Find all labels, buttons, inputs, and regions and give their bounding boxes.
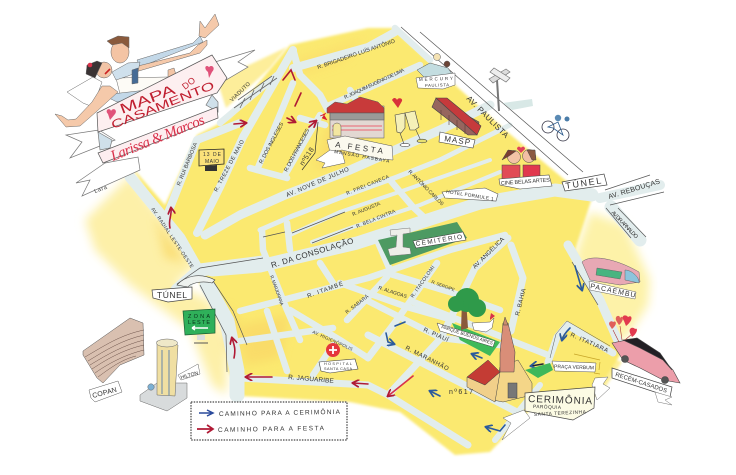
door [508,383,517,398]
ceremony ribbon [502,377,610,440]
ribbon [327,136,393,160]
bride head [96,62,112,78]
label: tunel top: TÚNEL [565,175,602,191]
street names: R. SERGIPE [431,279,456,292]
street names: R. MARANHÃO [404,345,450,373]
street names: R. RUI BARBOSA [176,142,199,187]
spire [503,317,508,325]
hand-drawn road outlines [177,27,664,372]
title banner: DO [180,75,197,92]
groom arm [130,40,207,73]
groom head [111,41,129,63]
label [178,364,200,380]
legend text: CAMINHO PARA A CERIMÔNIA [219,407,341,418]
red arrows: path to the party [169,70,413,396]
dog [472,318,494,332]
icon: champagne glasses and heart [392,98,427,147]
label: pacaembu and stadium: PACAEMBU [590,283,636,300]
street names: R. MARJORANA [269,275,285,306]
street sign post [489,68,510,111]
plaza: praca verbum: PRAÇA VERBUM [554,364,594,371]
sidewalk tile [503,99,533,110]
groom hand [199,14,219,38]
park: parque buenos aires: PARQUE BUENOS AIRES [441,324,494,346]
blue arrows: path to the ceremony [386,266,582,431]
legend: CAMINHO PARA A FESTA [218,425,325,434]
street names: R. ITAMBÉ [306,280,344,300]
map base: yellow city blocks [85,28,650,455]
street names: AV. PAULISTA [465,94,511,140]
label: hotel formule 1: HOTEL FORMULE 1 [446,189,494,203]
signature: Lara [94,184,109,195]
street names: R. BELA CINTRA [356,208,397,230]
label: cine belas artes [499,175,552,189]
roof [467,360,500,385]
street names: R. JOAQUIM EUGÊNIO DE LIMA [342,66,406,101]
ceremony ribbon: CERIMÔNIA [528,392,593,407]
street names: AV. DR. ARNALDO [610,210,639,241]
hospital santa casa [319,343,358,373]
label: pacaembu and stadium [582,258,640,300]
label: tunel left and portal: TÚNEL [157,290,187,300]
street names: R. AUGUSTA [352,201,382,218]
bride hand on back [168,68,178,86]
church: ceremony [449,317,532,402]
couple illustration [55,14,219,127]
hospital santa casa: HOSPITAL [324,362,352,366]
recem-casados ribbon: RECÉM-CASADOS [614,371,668,395]
street names: AV. HIGIENÓPOLIS [312,328,354,352]
street names: R. ALAGOAS [377,285,408,300]
sign: 13 de maio: 13 DE [203,152,222,158]
street names: AV. NOVE DE JULHO [285,167,350,199]
street names: R. FREI CANECA [346,174,391,197]
names banner: Larissa & Marcos [108,112,207,165]
street names: AV. REBOUÇAS [608,178,661,201]
street names: R. DA CONSOLAÇÃO [270,236,355,270]
street names: VIADUTO [229,81,252,103]
street names: R. ITATIARA [569,332,609,355]
title banner [97,55,227,132]
nave wall [467,372,500,402]
car body [612,340,680,383]
newlyweds car and hearts [609,315,680,384]
viaduct arches [234,76,277,108]
label: cine belas artes: CINE BELAS ARTES [501,178,550,187]
title text: MAPA [117,81,178,117]
mansion: a festa: A FESTA [335,140,384,156]
bride veil [67,77,102,107]
icon: bicycle [542,115,570,141]
label [437,323,495,347]
cemetery: CEMITÉRIO [415,232,463,248]
mansion: a festa: nº518 [299,147,316,167]
building: copan: COPAN [92,387,118,400]
mansion: a festa [299,97,393,170]
street names: R. ITACOLOMI [410,265,436,299]
tower [500,323,515,372]
facade [493,360,532,402]
sign: zona leste: LESTE [188,320,210,326]
street names: R. ANTÔNIO CARLOS [407,168,446,208]
building: hilton: HILTON [180,370,199,381]
street names [149,37,661,385]
number line [302,122,318,170]
label: tunel left and portal [152,276,215,302]
label [439,132,475,148]
sign: zona leste: ZONA [188,314,210,320]
balloons [609,316,623,329]
heart decoration on banner [107,109,116,120]
hotel building: mercury paulista: PAULISTA [425,82,449,88]
street names: AV. RADIAL LESTE-OESTE [149,207,195,270]
label [89,381,122,402]
street names: R. DOS FRANCESES [283,128,311,173]
street names: R. BAHIA [515,288,528,316]
street names: R. DOS INGLESES [258,121,285,165]
hotel building: mercury paulista [416,54,455,89]
red legend arrow [197,425,213,433]
mansion: a festa: MANSÃO HASBAYA [334,148,391,165]
cemetery [378,222,467,265]
building: copan [83,318,144,402]
street names: R. SABARÁ [344,293,371,316]
building: hilton [140,339,200,411]
sign: 13 de maio [199,149,224,171]
hotel building: mercury paulista: MERCURY [419,76,453,82]
street names: R. JAGUARIBE [288,374,335,385]
title banner: CASAMENTO [110,80,216,132]
kissing couple and hearts [502,147,540,180]
street names: R. TREZE DE MAIO [213,139,246,193]
groom sleeve [137,36,203,67]
bride arm [55,86,118,127]
street names: R. BRIGADEIRO LUÍS ANTÔNIO [316,37,397,71]
ceremony ribbon: PARÓQUIA [533,403,562,411]
ceremony ribbon: SANTA TEREZINHA [534,409,587,418]
plaza: praca verbum [525,354,600,378]
masp building: MASP [444,134,471,147]
bride dress [116,68,190,94]
heart decoration on banner [205,66,214,78]
car roof [623,338,672,370]
number: nº617 [449,389,473,396]
groom shirt and tie [112,62,140,80]
legend [191,402,347,440]
title banner tails [66,50,255,196]
blue legend arrow [199,410,213,416]
park: parque buenos aires [437,288,500,356]
street network [130,28,660,445]
masp building [432,98,481,148]
sign: zona leste [183,309,215,343]
sign: 13 de maio: MAIO [205,159,219,165]
recem-casados ribbon [612,368,672,405]
hospital santa casa: SANTA CASA [324,367,352,371]
route arrows [169,70,582,431]
street names: R. PIAUÍ [422,326,450,344]
street names: AV. ANGÉLICA [471,236,506,270]
